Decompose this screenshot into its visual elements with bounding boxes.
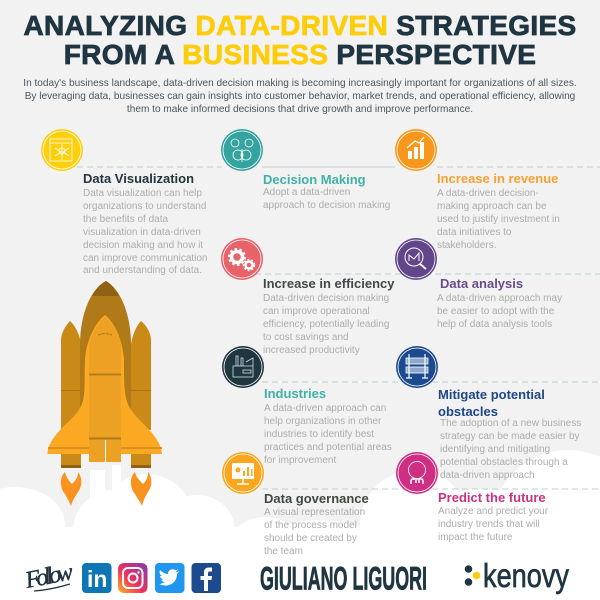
panel: mitigate potential obstacles <box>438 387 581 481</box>
heading: Data governance <box>264 491 369 506</box>
body text <box>437 188 560 251</box>
icon: instagram <box>118 563 148 593</box>
body text: to cost savings and <box>263 332 349 343</box>
body text <box>83 188 208 276</box>
body text: A data-driven decision- <box>437 188 539 199</box>
body text: increased productivity <box>263 345 360 356</box>
icon: twitter <box>155 563 184 593</box>
body text: Analyze and predict your <box>438 506 548 517</box>
body text: impact the future <box>438 532 512 543</box>
intro paragraph: By leveraging data, businesses can gain insights into customer behavior, market trends, and operational efficiency, allowing <box>25 91 575 102</box>
body text: practices and potential areas <box>264 442 392 453</box>
body text: visualization in data-driven <box>83 227 201 238</box>
body text: Data-driven decision making <box>263 293 389 304</box>
clouds <box>0 450 600 600</box>
panel: industries <box>264 386 392 466</box>
heading: obstacles <box>438 404 498 419</box>
body text: Data visualization can help <box>83 188 202 199</box>
heading: Decision Making <box>263 172 366 187</box>
panel: predict the future <box>438 490 548 543</box>
icon: industries <box>222 346 264 388</box>
body text: A data-driven approach may <box>437 293 562 304</box>
body text <box>263 293 389 356</box>
heading: Increase in revenue <box>437 171 558 186</box>
icon: predict the future <box>396 452 438 494</box>
heading: Increase in efficiency <box>263 276 395 291</box>
body text: data initiatives to <box>437 227 512 238</box>
rocket <box>48 281 162 506</box>
flames <box>61 472 81 506</box>
heading: Data analysis <box>440 276 523 291</box>
follow signature: Follow <box>22 559 75 594</box>
body text: can improve communication <box>83 253 208 264</box>
icon: data analysis <box>395 238 437 280</box>
body text: used to justify investment in <box>437 214 560 225</box>
icon: data visualization <box>41 129 83 171</box>
name: Giuliano Liguori: GIULIANO LIGUORI <box>260 560 427 596</box>
body text <box>263 187 390 211</box>
panel: decision making <box>263 172 390 211</box>
title: FROM A BUSINESS PERSPECTIVE <box>64 39 536 70</box>
heading: Data Visualization <box>83 171 194 186</box>
dashed lines <box>77 167 600 489</box>
heading: Predict the future <box>438 490 546 505</box>
icon: linkedin: in <box>87 566 107 592</box>
orbiter <box>48 315 162 454</box>
body text <box>264 403 392 466</box>
icon: increase in revenue <box>395 129 437 171</box>
logo: kenovy: kenovy <box>483 557 569 594</box>
heading: Mitigate potential <box>438 387 545 402</box>
icon: mitigate obstacles <box>396 346 438 388</box>
body text: approach to decision making <box>263 200 390 211</box>
right booster <box>131 321 151 430</box>
body text: strategy can be made easier by <box>440 431 580 442</box>
body text: potential obstacles through a <box>440 457 568 468</box>
body text <box>264 507 365 557</box>
body text: A visual representation <box>264 507 365 518</box>
icon: linkedin <box>82 563 112 593</box>
body text: The adoption of a new business <box>440 418 581 429</box>
body text <box>440 418 581 481</box>
orbiter center panel <box>89 317 121 462</box>
body text: should be created by <box>264 533 357 544</box>
main tank <box>80 281 131 420</box>
icon: data governance <box>222 452 264 494</box>
body text: be easier to adopt with the <box>437 306 554 317</box>
panel: increase in revenue <box>437 171 560 251</box>
body text: stakeholders. <box>437 240 496 251</box>
icon: decision making <box>221 129 263 171</box>
body text: industry trends that will <box>438 519 540 530</box>
body text: can improve operational <box>263 306 370 317</box>
body text: for improvement <box>264 455 336 466</box>
booster tails <box>61 450 81 468</box>
intro paragraph: them to make informed decisions that drive growth and improve performance. <box>127 104 473 115</box>
heading: Industries <box>264 386 326 401</box>
body text: and understanding of data. <box>83 265 202 276</box>
icon: increase in efficiency <box>221 238 263 280</box>
body text: help organizations in other <box>264 416 381 427</box>
title <box>23 10 577 70</box>
body text: Adopt a data-driven <box>263 187 350 198</box>
title: ANALYZING DATA-DRIVEN STRATEGIES <box>23 10 577 41</box>
body text: the benefits of data <box>83 214 168 225</box>
body text: A data-driven approach can <box>264 403 386 414</box>
body text: identifying and mitigating <box>440 444 550 455</box>
body text: efficiency, potentially leading <box>263 319 389 330</box>
body text: organizations to understand <box>83 201 206 212</box>
panel: increase in efficiency <box>263 276 395 356</box>
icon: facebook <box>192 563 221 593</box>
panel: data visualization <box>83 171 208 276</box>
panel: data governance <box>264 491 369 557</box>
body text: industries to identify best <box>264 429 374 440</box>
intro paragraph: In today's business landscape, data-driven decision making is becoming increasingly important for organizations of all sizes. <box>23 78 577 89</box>
left booster <box>61 321 81 430</box>
intro paragraph <box>23 78 577 115</box>
body text: making approach can be <box>437 201 547 212</box>
body text: decision making and how it <box>83 240 203 251</box>
body text: help of data analysis tools <box>437 319 552 330</box>
body text <box>438 506 548 543</box>
heading <box>438 387 545 419</box>
panel: data analysis <box>437 276 562 330</box>
body text: data-driven approach <box>440 470 535 481</box>
body text <box>437 293 562 330</box>
body text: of the process model <box>264 520 357 531</box>
body text: the team <box>264 546 303 557</box>
